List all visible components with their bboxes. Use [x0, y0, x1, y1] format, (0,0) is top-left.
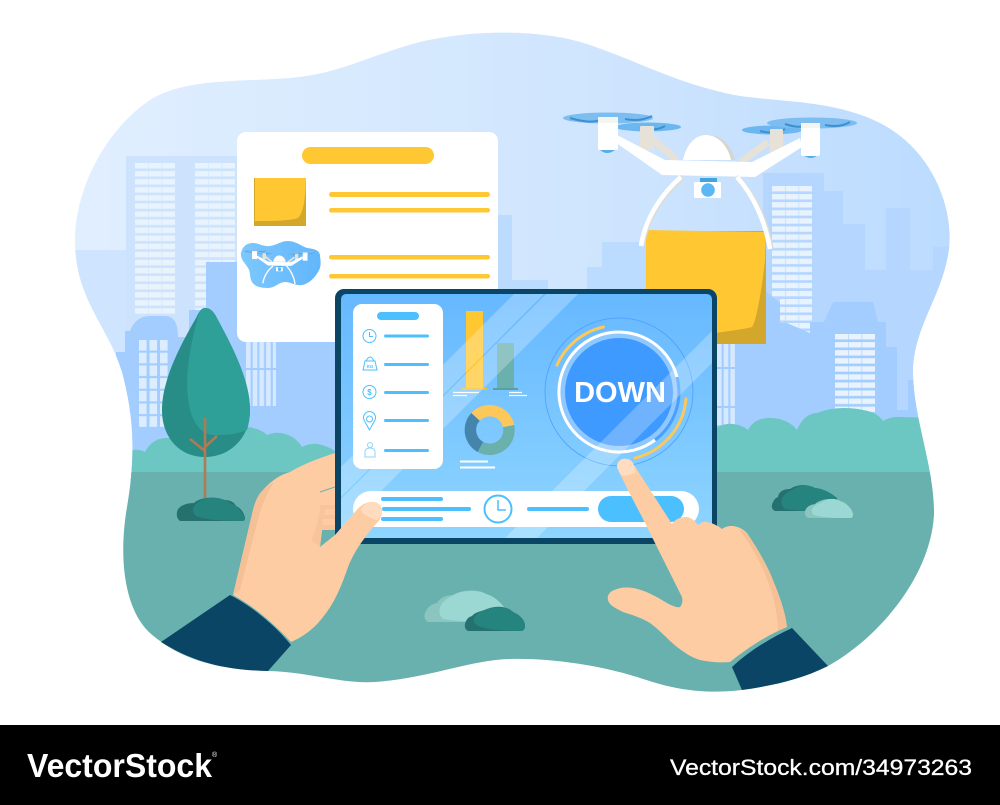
dome [683, 135, 735, 160]
far skyline right [763, 173, 950, 472]
icon: dollar [363, 386, 376, 398]
right hand [608, 459, 828, 690]
bush dark right [772, 485, 837, 511]
front motors [598, 117, 820, 158]
mid skyline right [717, 292, 918, 430]
bottom bar button [598, 496, 684, 522]
right sleeve [732, 628, 828, 690]
icon: kg weight [363, 357, 377, 370]
bush dark centre [465, 607, 525, 631]
bushes right [717, 408, 932, 480]
far skyline left band [75, 250, 126, 386]
watermark bar [0, 725, 1000, 805]
icon: map pin [364, 412, 376, 430]
left sleeve [161, 595, 291, 671]
stripe windows under card [246, 342, 276, 406]
button label: DOWN [574, 377, 666, 409]
left info panel [353, 304, 443, 469]
far skyline centre [498, 215, 646, 289]
card mini drone blob [241, 241, 321, 288]
panel pill [377, 312, 419, 320]
card parcel icon [254, 178, 306, 226]
camera [694, 178, 721, 198]
fingernail [617, 459, 636, 476]
card text lines [329, 192, 490, 278]
donut chart [460, 411, 509, 468]
sky [60, 20, 960, 480]
icon: dollar: $ [367, 388, 372, 397]
bush pale right [805, 499, 853, 518]
tablet frame [335, 289, 717, 544]
icon: clock [363, 330, 376, 342]
dome building windows [139, 340, 169, 427]
bottom bar [353, 491, 699, 527]
icon: bottom clock [484, 496, 512, 522]
big down button rings [545, 318, 693, 466]
watermark url: VectorStock.com/34973263 [670, 755, 972, 780]
stripe windows right of tablet [717, 344, 735, 425]
tablet [335, 289, 717, 544]
watermark registered mark: ® [212, 751, 218, 759]
bar chart [453, 311, 527, 396]
right hand shape [608, 459, 787, 662]
bottom bar lines [381, 497, 589, 521]
bushes left [120, 427, 340, 480]
rear arms [653, 140, 768, 162]
left palm and thumb [233, 453, 382, 642]
body [615, 135, 802, 177]
right hand shadow [738, 528, 787, 631]
watermark logo: VectorStock [27, 747, 213, 784]
panel lines [384, 334, 429, 452]
far left tower [126, 156, 237, 440]
delivery drone [563, 112, 857, 249]
right building windows [835, 334, 875, 412]
right tower windows [772, 186, 812, 333]
mini drone [243, 250, 317, 284]
left palm crease line [320, 487, 335, 492]
left hand [161, 453, 382, 671]
rear motors [640, 126, 783, 153]
bush pale centre [424, 590, 508, 622]
ground [100, 472, 960, 702]
card title pill [302, 147, 434, 164]
left hand shadow [233, 482, 274, 595]
rotors [563, 112, 857, 134]
screen glass stripes [341, 294, 712, 538]
bush under tree [177, 498, 245, 521]
icon: person [365, 442, 375, 457]
parcel box [646, 230, 766, 344]
icon: kg weight: KG [367, 364, 374, 369]
mid skyline left [116, 262, 345, 480]
background blob scene [60, 20, 960, 702]
left thumbnail [361, 502, 382, 520]
tablet screen [341, 294, 712, 538]
legs [641, 177, 771, 249]
left finger creases [311, 505, 335, 547]
tree [162, 308, 250, 498]
card panel [237, 132, 498, 342]
